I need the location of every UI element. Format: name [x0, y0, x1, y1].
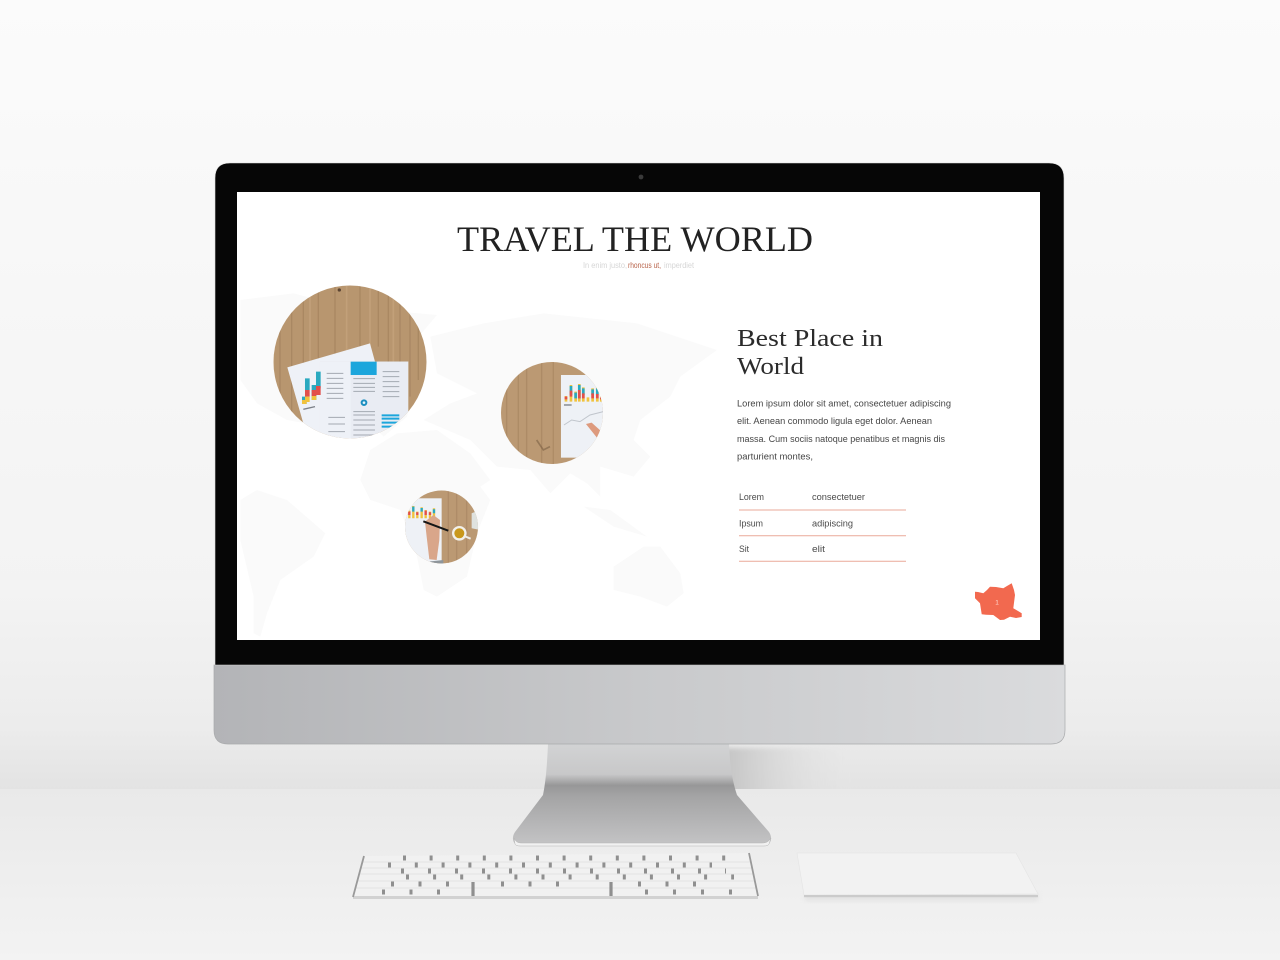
subtitle: rhoncus ut,	[628, 261, 661, 270]
photo: hand with pen and coffee cup	[405, 490, 478, 564]
keyboard	[353, 853, 758, 899]
heading: best place in world: Best Place in	[737, 326, 883, 352]
monitor bezel	[215, 163, 1064, 665]
body paragraph: elit. Aenean commodo ligula eget dolor. Aenean	[737, 416, 932, 427]
subtitle: imperdiet	[664, 261, 695, 270]
body paragraph	[737, 398, 951, 462]
body paragraph: parturient montes,	[737, 452, 813, 462]
detail table: elit	[812, 543, 825, 554]
page number badge	[975, 583, 1022, 620]
monitor stand	[513, 744, 771, 846]
heading: best place in world	[737, 326, 883, 380]
detail table	[739, 491, 906, 561]
detail table: Sit	[739, 543, 749, 554]
detail table: adipiscing	[812, 517, 853, 528]
screen slide	[237, 192, 1040, 640]
body paragraph: Lorem ipsum dolor sit amet, consectetuer adipiscing	[737, 398, 951, 410]
world map watermark	[240, 293, 717, 637]
detail table: consectetuer	[812, 491, 865, 502]
subtitle: In enim justo,	[583, 261, 627, 270]
photo: documents on wood table	[274, 286, 426, 438]
detail table: Ipsum	[739, 517, 763, 528]
detail table: Lorem	[739, 491, 764, 502]
title: TRAVEL THE WORLD	[457, 219, 813, 259]
photo: hand on chart on wood table	[501, 362, 603, 464]
subtitle	[583, 261, 695, 270]
heading: best place in world: World	[737, 354, 804, 380]
desk surface	[0, 789, 1280, 960]
icon: webcam	[639, 175, 643, 179]
trackpad	[797, 853, 1038, 901]
body paragraph: massa. Cum sociis natoque penatibus et magnis dis	[737, 434, 945, 445]
monitor chin	[214, 665, 1065, 744]
page number badge: 1	[995, 600, 999, 606]
stand shadow on wall	[725, 748, 860, 794]
